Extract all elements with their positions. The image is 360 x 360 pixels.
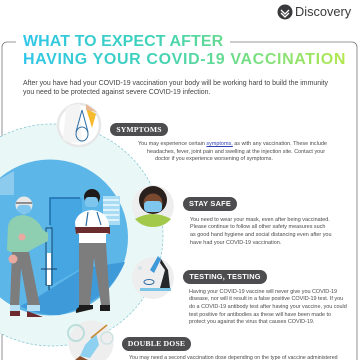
text: stay safe [190, 216, 332, 246]
intro text [23, 80, 328, 96]
wall panel [103, 196, 120, 225]
text: symptoms: You may experience certain symptoms, as with any vaccination. These include [138, 141, 327, 147]
title [23, 33, 348, 69]
door [50, 198, 82, 286]
logo icon [278, 4, 292, 20]
heading: testing: TESTING, TESTING [189, 272, 261, 281]
heading: double dose [122, 337, 191, 350]
intro text: After you have had your COVID-19 vaccination your body will be working hard to build the immunity [23, 80, 328, 87]
icon: microscope medallion [132, 256, 174, 299]
text: symptoms [138, 141, 327, 162]
text: stay safe: have had your COVID-19 vaccination. [190, 240, 281, 246]
blue disc with clinic scene [0, 160, 128, 317]
intro text: you need to be protected against severe COVID-19 infection. [23, 89, 210, 96]
text: stay safe: You need to wear your mask, even after being vaccinated. [190, 216, 330, 222]
text: testing: do a COVID-19 antibody test after having your vaccine, you could [189, 304, 347, 310]
heading: stay safe [183, 197, 237, 210]
text: symptoms: doctor if you experience worsening of symptoms. [155, 156, 273, 162]
text: symptoms: headaches, fever, joint pain and swelling at the injection site. Contact your [147, 149, 325, 155]
heading: symptoms: SYMPTOMS [116, 124, 162, 134]
heading: stay safe: STAY SAFE [189, 199, 231, 208]
text: testing: test positive for antibodies as these will have been made to [189, 312, 331, 318]
text: testing: disease, nor will it result in a false positive COVID-19 test. If you [189, 296, 343, 302]
heading: testing [183, 270, 267, 284]
heading: symptoms [110, 122, 168, 136]
text: testing: protect you against the virus that causes COVID-19. [189, 319, 314, 325]
icon: vaccine medallion [68, 320, 114, 360]
icon: stethoscope medallion [58, 104, 100, 146]
pale dashed disc [0, 124, 163, 346]
logo wordmark: Discovery [295, 4, 351, 19]
text: testing [189, 288, 347, 325]
doctor [75, 189, 110, 313]
syringe / thermometer [41, 228, 57, 290]
text: stay safe: Please continue to follow all other safety measures such [190, 224, 325, 230]
icon: masked person medallion [132, 185, 174, 227]
elderly patient [7, 196, 48, 317]
text: stay safe: as good hand hygiene and social distancing even after you [190, 232, 331, 238]
heading: double dose: DOUBLE DOSE [128, 339, 185, 348]
text: testing: Having your COVID-19 vaccine will never give you COVID-19 [189, 288, 337, 294]
